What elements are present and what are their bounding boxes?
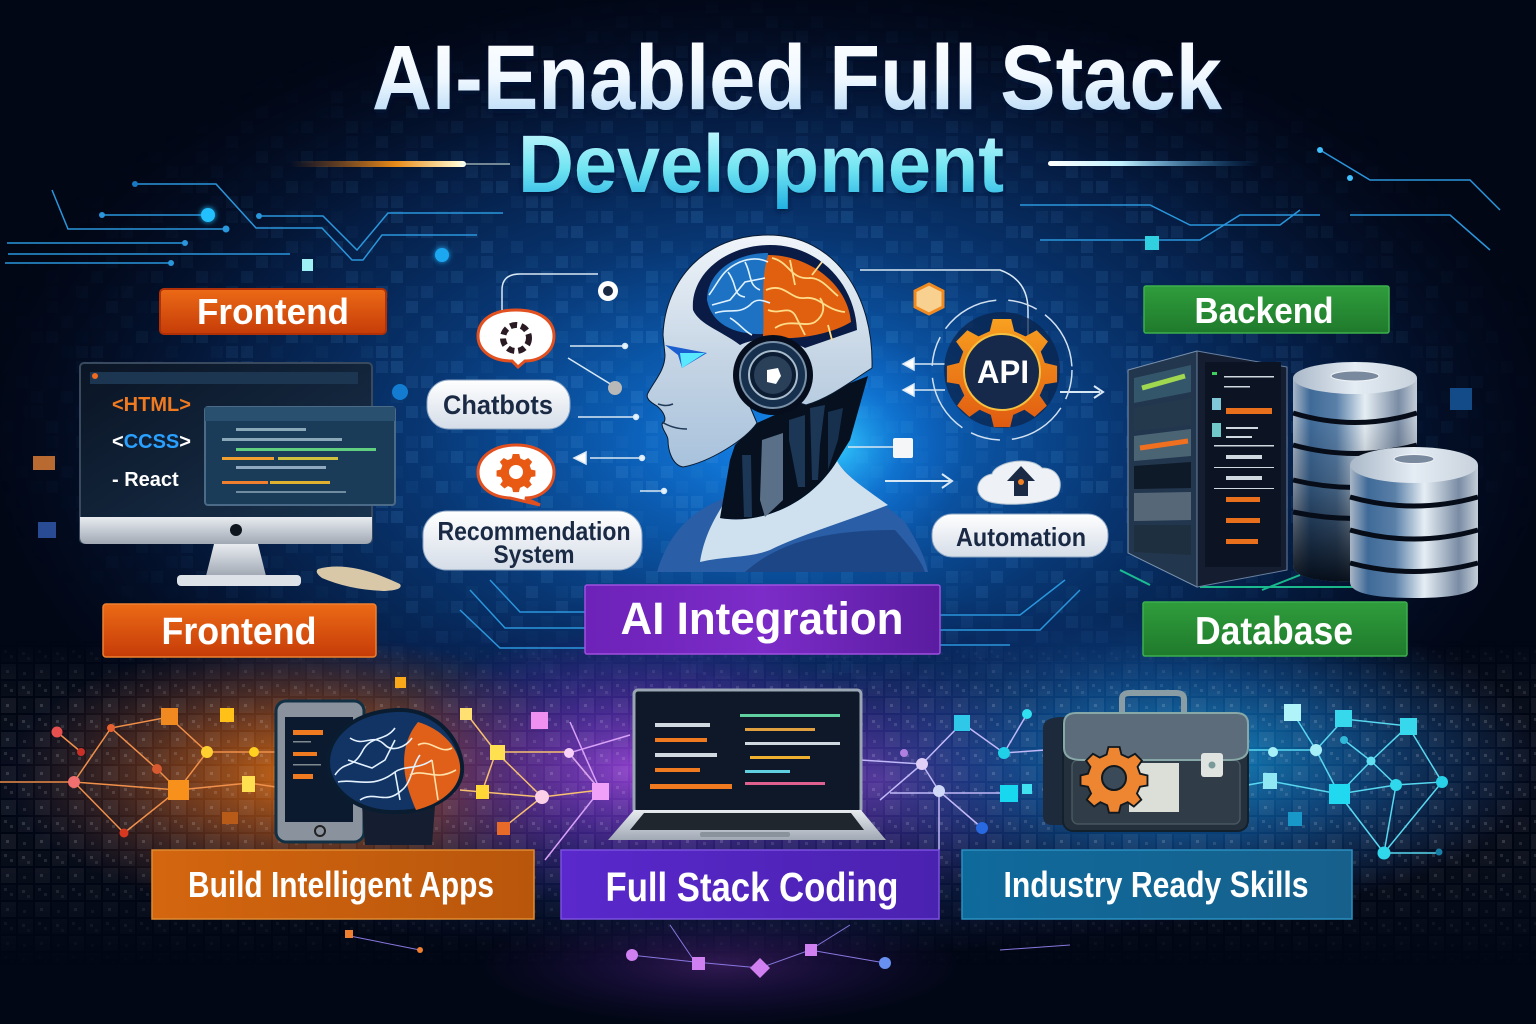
overlapping code window bbox=[205, 407, 395, 505]
title bbox=[290, 27, 1258, 210]
icon: chatbot speech bubble bbox=[478, 310, 554, 367]
network: purple centre bbox=[531, 709, 1045, 860]
icon: recommendation bubble bbox=[478, 445, 554, 505]
monitor code text: <HTML> bbox=[112, 394, 191, 416]
mouse bbox=[317, 567, 401, 591]
network: bottom bbox=[345, 925, 1070, 978]
monitor code text: - React bbox=[112, 469, 179, 491]
network: cyan right bbox=[1248, 704, 1448, 860]
label: Frontend lower bbox=[103, 604, 376, 657]
brain bbox=[328, 710, 462, 812]
brain base bbox=[362, 806, 435, 845]
pill: Chatbots: Chatbots bbox=[443, 390, 553, 420]
pill: Automation: Automation bbox=[956, 522, 1086, 552]
title light streak right bbox=[1048, 161, 1258, 166]
label: Backend: Backend bbox=[1194, 290, 1334, 331]
icon: laptop with code bbox=[608, 690, 886, 840]
banner: Build Intelligent Apps: Build Intelligent Apps bbox=[188, 864, 494, 905]
label: AI Integration: AI Integration bbox=[620, 593, 904, 644]
pill: Automation bbox=[932, 514, 1108, 557]
headphone bbox=[733, 335, 813, 415]
label: AI Integration bbox=[585, 585, 940, 654]
green floor glow bbox=[1120, 570, 1360, 590]
shoulders bbox=[657, 462, 928, 572]
label: Frontend lower: Frontend bbox=[162, 611, 316, 653]
pill: Recommendation System bbox=[423, 511, 642, 570]
collar bbox=[700, 461, 888, 562]
decorative nodes bbox=[33, 147, 1472, 538]
icon: phone and brain bbox=[276, 701, 462, 845]
label: Frontend top: Frontend bbox=[197, 291, 349, 332]
icon: automation cloud bbox=[978, 461, 1060, 504]
banner: Full Stack Coding: Full Stack Coding bbox=[606, 864, 898, 910]
banner: Full Stack Coding bbox=[561, 850, 939, 919]
banner: Build Intelligent Apps bbox=[152, 850, 534, 919]
monitor code text bbox=[112, 394, 191, 491]
label: Database: Database bbox=[1195, 610, 1353, 653]
title light streak left bbox=[290, 161, 510, 167]
pill: Chatbots bbox=[427, 380, 570, 429]
network: orange left bbox=[0, 677, 600, 838]
API text: API bbox=[977, 354, 1029, 390]
banner: Industry Ready Skills bbox=[962, 850, 1352, 919]
title line 2: Development bbox=[518, 119, 1004, 210]
mouth and nose bbox=[658, 404, 687, 429]
neck bars bbox=[742, 405, 843, 517]
icon: toolbox with gear bbox=[1043, 693, 1248, 831]
circuit traces bbox=[5, 150, 1500, 648]
icon: desktop monitor with code bbox=[80, 363, 401, 591]
icon: front database cylinders bbox=[1350, 447, 1478, 598]
pill: Recommendation System: System bbox=[494, 541, 574, 569]
title line 1: AI-Enabled Full Stack bbox=[372, 27, 1223, 129]
eye bbox=[665, 345, 707, 368]
icon: API gear bbox=[932, 300, 1072, 440]
icon: back database cylinders bbox=[1293, 362, 1417, 582]
connector lines around head bbox=[502, 270, 1103, 494]
monitor code text: <CCSS> bbox=[112, 431, 191, 453]
label: Database bbox=[1143, 602, 1407, 656]
brain bbox=[707, 253, 851, 340]
illustration: AI head bbox=[647, 235, 928, 572]
brain window bbox=[693, 245, 857, 348]
head shell bbox=[647, 235, 872, 467]
pill: Recommendation System: Recommendation bbox=[438, 516, 630, 546]
icon: server rack bbox=[1128, 351, 1287, 587]
banner: Industry Ready Skills: Industry Ready Skills bbox=[1004, 864, 1308, 905]
label: Frontend top bbox=[160, 289, 386, 334]
neck bbox=[720, 376, 868, 519]
icons: small connector dots bbox=[598, 281, 943, 458]
label: Backend bbox=[1144, 286, 1389, 333]
